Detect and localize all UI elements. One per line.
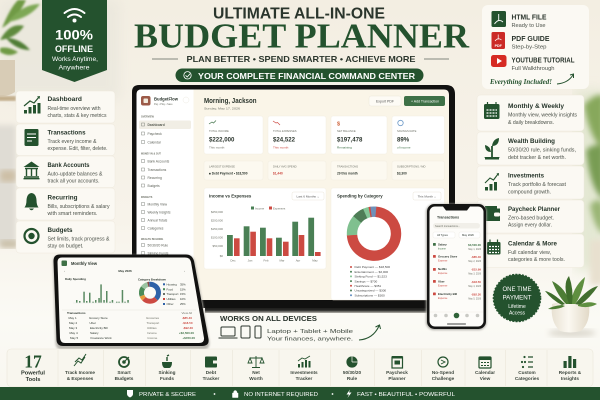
phone <box>426 204 486 330</box>
phone rows: May 4, 2026 <box>468 286 482 288</box>
phone rows: Expense <box>438 259 448 262</box>
tablet transactions table: Utilities <box>147 326 157 330</box>
buttons <box>369 96 445 106</box>
sidebar: Pay • Play • Save <box>154 103 173 106</box>
dashboard heading: Sunday, May 17, 2026 <box>204 106 240 110</box>
sidebar: Weekly Insights <box>148 210 171 214</box>
tablet transactions table: Transport <box>146 321 159 325</box>
tablet transactions table: May 3 <box>69 326 78 330</box>
feature: wealth building: 50/30/20 rule, sinking funds, <box>508 148 576 154</box>
feature: investments: Track portfolio & forecast <box>508 182 567 188</box>
stat card: total income: This month <box>209 146 225 150</box>
stat card: total income: $222,000 <box>209 136 235 144</box>
phone rows: May 1, 2026 <box>468 249 482 251</box>
tool: track income <box>65 354 95 381</box>
tool: custom categories: Custom <box>518 370 536 375</box>
tablet bar chart <box>65 277 130 303</box>
tablet transactions table: Income <box>147 331 157 335</box>
feature: dashboard: Real-time overview with <box>48 106 101 112</box>
stat card: savings rate: of income <box>397 146 411 150</box>
tool: debt tracker <box>203 356 220 381</box>
tool: net worth <box>248 356 264 381</box>
stat card: total expenses: This month <box>273 146 289 150</box>
phone rows: $3,500.00 <box>468 243 481 247</box>
tablet donut: 15% <box>180 292 186 296</box>
tablet donut: 15% <box>180 287 186 291</box>
tablet transactions table: View All <box>182 311 192 315</box>
donut chart: spending by category: Debt Payment — $18,500 <box>354 265 390 269</box>
stat card: net balance: NET BALANCE <box>337 129 356 133</box>
bar chart: income vs expenses: $50,000 <box>213 244 223 248</box>
phone rows: -$15.99 <box>471 268 481 272</box>
tablet transactions table: Salary <box>90 331 99 335</box>
phone rows: Netflix <box>438 267 447 271</box>
tool: calendar view: Calendar <box>475 370 495 375</box>
sidebar <box>136 90 194 300</box>
works on all devices: Laptop + Tablet + Mobile <box>267 329 353 335</box>
tool: investments tracker: Tracker <box>296 376 313 381</box>
stat card: net balance: Remaining <box>337 146 352 150</box>
tablet transactions table: Groceries <box>146 316 160 320</box>
feature: recurring: with smart reminders. <box>48 211 98 217</box>
bar chart: income vs expenses <box>204 188 326 269</box>
tablet transactions table: -$92.30 <box>183 326 193 330</box>
bar chart: income vs expenses: Dec <box>230 258 236 262</box>
tablet transactions table: May 2 <box>69 321 78 325</box>
stat card: total expenses: $24,522 <box>273 136 296 144</box>
sidebar: MONEY IN & OUT <box>141 152 161 156</box>
mini cards: SUBSCRIPTIONS / MO <box>397 164 426 168</box>
feature: recurring: Recurring <box>48 194 78 202</box>
tool: debt tracker: Tracker <box>203 376 220 381</box>
offline banner: 100% <box>55 26 94 42</box>
feature: monthly and weekly: Monthly & Weekly <box>508 103 564 110</box>
sidebar: Recurring <box>148 176 162 180</box>
feature: investments <box>477 166 584 199</box>
tablet screen: › <box>184 269 185 273</box>
phone rows <box>433 242 482 300</box>
stat card: net balance: $197,478 <box>337 136 363 144</box>
bar chart: income vs expenses: $200,000 <box>211 218 223 222</box>
offline banner: Works Anytime, <box>52 57 98 63</box>
phone rows: Salary <box>438 242 447 246</box>
title block: PLAN BETTER • SPEND SMARTER • ACHIEVE MORE <box>186 54 416 64</box>
feature: budgets: Budgets <box>48 227 73 234</box>
phone rows: Electricity Bill <box>438 292 457 296</box>
tablet donut: Utilities <box>166 297 176 301</box>
tablet donut: 25% <box>180 302 186 306</box>
stat card: savings rate <box>392 116 444 154</box>
dashboard heading: Morning, Jackson <box>204 98 256 105</box>
tablet screen: Monthly View <box>71 261 98 266</box>
title block: BUDGET PLANNER <box>134 16 470 56</box>
phone rows: May 2, 2026 <box>468 261 482 263</box>
phone rows: Expense <box>438 284 448 287</box>
tool: paycheck planner <box>386 356 408 381</box>
phone nav <box>430 312 483 324</box>
bar chart: income vs expenses: $0 <box>220 254 223 258</box>
stat card: total expenses: TOTAL EXPENSES <box>273 129 297 133</box>
mini cards: DAILY AVG SPEND <box>273 164 297 168</box>
feature: paycheck planner <box>477 200 584 233</box>
feature: budgets: stay on budget. <box>48 244 84 250</box>
icon: lock <box>232 390 238 398</box>
panel: included files: Full Walkthrough <box>512 66 554 72</box>
phone rows: Expense <box>438 272 448 275</box>
tool: calendar view: View <box>480 376 491 381</box>
one time payment badge <box>494 274 540 322</box>
works on all devices: Your finances, anywhere. <box>267 336 354 342</box>
tool: smart budgets: Smart <box>117 370 131 375</box>
tool: reports and insights: Insights <box>561 376 579 381</box>
feature: calendar and more: Calendar & More <box>508 240 557 248</box>
tablet transactions table <box>62 310 196 340</box>
panel: included files: HTML FILE <box>512 12 547 22</box>
tool: paycheck planner: Paycheck <box>386 370 408 375</box>
one time payment badge: PAYMENT <box>502 294 532 302</box>
tool: no-spend challenge: Challenge <box>432 376 455 381</box>
tool: 50/30/20 rule <box>343 356 362 381</box>
tool: sinking funds: Funds <box>160 376 174 381</box>
tablet donut: 10% <box>180 297 186 301</box>
phone rows: Uber <box>438 280 445 284</box>
donut chart: spending by category <box>331 188 444 300</box>
sidebar: Sinking Funds <box>148 252 169 256</box>
tablet screen: ‹ <box>64 269 65 273</box>
feature: recurring: Bills, subscriptions & salary <box>48 204 110 210</box>
decorative plant: top left <box>0 0 40 101</box>
tablet transactions table: Uber <box>90 321 96 325</box>
one time payment badge: Lifetime <box>508 304 526 310</box>
tablet screen <box>58 258 204 343</box>
tablet transactions table: -$18.50 <box>182 321 193 325</box>
bar chart: income vs expenses: $100,000 <box>211 236 223 240</box>
tablet transactions table: May 5 <box>70 336 79 340</box>
tool: net worth: Worth <box>249 376 263 381</box>
phone rows: -$18.50 <box>471 280 481 284</box>
feature: transactions: Transactions <box>48 130 86 136</box>
mini cards: 29 this month <box>337 172 358 176</box>
works on all devices <box>218 314 380 342</box>
title block: ULTIMATE ALL-IN-ONE <box>213 6 385 22</box>
mini cards <box>204 161 444 180</box>
offline banner: OFFLINE <box>55 44 93 54</box>
sidebar: Monthly View <box>148 202 168 206</box>
panel: right feature cards <box>477 95 584 268</box>
tool: 50/30/20 rule: 50/30/20 <box>343 370 362 375</box>
bar chart: income vs expenses: Expenses <box>273 206 286 210</box>
tool: reports and insights: Reports & <box>559 370 582 375</box>
phone rows: Grocery Store <box>438 254 458 258</box>
feature: bank accounts: Auto-update balances & <box>48 172 103 178</box>
feature: wealth building: debt tracker & net worth. <box>508 155 566 161</box>
sidebar: INSIGHTS <box>141 196 153 199</box>
feature: recurring <box>16 188 115 220</box>
donut chart: spending by category: Subscriptions — $300 <box>354 293 385 297</box>
tool: no-spend challenge <box>432 357 455 381</box>
mini cards: ■ Debt Payment • $18,500 <box>209 172 248 176</box>
footer bar: NO INTERNET REQUIRED <box>244 392 318 398</box>
plant: potted succulent <box>545 276 598 337</box>
tablet transactions table: May 4 <box>70 331 78 335</box>
tablet transactions table: Freelance Work <box>90 336 112 340</box>
feature: dashboard: charts, stats & key metrics <box>48 113 107 119</box>
feature: paycheck planner: Paycheck Planner <box>508 206 560 213</box>
bar chart: income vs expenses: Income <box>255 206 265 210</box>
feature: wealth building <box>477 132 584 165</box>
bar chart: income vs expenses: $250,000 <box>211 210 223 214</box>
tool: track income: Track Income <box>65 370 95 375</box>
feature: budgets: Set limits, track progress & <box>48 236 110 242</box>
one time payment badge: Access <box>509 310 526 316</box>
tablet screen: May 2026 <box>118 269 132 273</box>
donut chart: spending by category: Spending by Category <box>337 194 383 198</box>
feature: wealth building: Wealth Building <box>508 138 555 145</box>
tool count: 17 <box>24 352 42 372</box>
sidebar: Categories <box>148 226 164 230</box>
mini cards: TRANSACTIONS <box>337 164 358 168</box>
panel: included files: PDF GUIDE <box>512 34 550 43</box>
sidebar: Calendar <box>148 140 162 144</box>
bar chart: income vs expenses: Mar <box>280 258 285 262</box>
donut chart: spending by category: This Month ⌄ <box>418 194 436 198</box>
sidebar: Annual Totals <box>148 218 168 222</box>
title block <box>134 6 470 82</box>
stat card: savings rate: 89% <box>397 136 410 144</box>
tool: net worth: Net <box>252 370 260 375</box>
tablet donut: Category Breakdown <box>138 278 166 282</box>
panel: included files: Everything Included! <box>489 77 552 86</box>
bar chart: income vs expenses: Last 6 Months ⌄ <box>297 194 319 198</box>
bar chart: income vs expenses: Apr <box>296 258 300 262</box>
sidebar: 50/30/20 Rule <box>148 244 168 248</box>
phone screen <box>430 206 484 326</box>
tablet transactions table: Transactions <box>67 311 86 315</box>
donut chart: spending by category: Savings — $700 <box>354 279 377 283</box>
bar chart: income vs expenses: Income vs Expenses <box>209 194 252 198</box>
arrow <box>359 325 380 340</box>
tool: custom categories: Categories <box>515 376 540 381</box>
sidebar: Dashboard <box>148 123 165 127</box>
arrow <box>557 74 574 84</box>
tablet bar chart: Daily Spending <box>65 277 86 281</box>
phone screen: All Types <box>437 233 449 237</box>
stat card: net balance <box>331 116 387 154</box>
buttons: Export PDF <box>376 99 394 103</box>
laptop screen <box>136 90 449 300</box>
tool: investments tracker <box>290 356 318 381</box>
tool: 50/30/20 rule: Rule <box>347 376 357 381</box>
tagline pill: YOUR COMPLETE FINANCIAL COMMAND CENTER <box>198 71 416 81</box>
bar chart: income vs expenses: Jan <box>248 258 253 262</box>
feature: budgets <box>16 221 115 253</box>
phone rows: -$85.40 <box>471 255 481 259</box>
phone rows: Expense <box>438 297 448 300</box>
tool count: Tools <box>26 377 40 383</box>
dashboard heading <box>204 98 256 110</box>
stat card: net balance: $ <box>337 122 340 128</box>
feature: monthly and weekly: & daily breakdowns. <box>508 120 554 126</box>
tablet donut: Food <box>166 287 173 291</box>
feature: calendar and more: Full calendar view, <box>508 250 551 256</box>
feature: transactions: Track every income & <box>48 139 97 145</box>
sidebar: Bank Accounts <box>148 159 170 163</box>
tool: no-spend challenge: No-Spend <box>432 370 454 375</box>
sidebar: OVERVIEW <box>141 116 155 118</box>
feature: bank accounts: Bank Accounts <box>48 162 90 169</box>
stat card: total income <box>204 116 263 154</box>
feature: paycheck planner: Zero-based budget. <box>508 216 554 222</box>
laptop <box>132 85 455 313</box>
stat card: total income: TOTAL INCOME <box>209 129 229 133</box>
feature: dashboard <box>16 91 115 123</box>
phone screen: Transactions <box>437 216 459 220</box>
icon: shield <box>127 390 133 398</box>
donut chart: spending by category: Sinking Fund — $1,523 <box>354 275 387 279</box>
feature: investments: Investments <box>508 172 544 180</box>
tool: smart budgets: Budgets <box>115 376 134 381</box>
feature: paycheck planner: Assign every dollar. <box>508 222 552 228</box>
tablet donut: 35% <box>180 282 186 286</box>
offline banner: Anywhere <box>58 66 90 72</box>
tablet transactions table: -$85.40 <box>182 316 192 320</box>
feature: transactions: expense. Edit, filter, delete. <box>48 146 108 152</box>
one time payment badge: ONE TIME <box>502 286 532 293</box>
mini cards: $1,440 <box>273 172 283 176</box>
offline banner <box>42 0 107 82</box>
icon: devices <box>218 326 261 338</box>
buttons: + Add Transaction <box>411 99 439 103</box>
bar chart: income vs expenses: Feb <box>264 258 269 262</box>
tool count <box>21 352 45 383</box>
icon: youtube <box>491 55 506 67</box>
tool: sinking funds <box>159 355 176 381</box>
sidebar: WEALTH BUILDING <box>141 238 163 241</box>
icon: bolt <box>346 390 352 398</box>
tools bar <box>7 349 593 386</box>
feature: calendar and more <box>477 234 584 268</box>
tool: debt tracker: Debt <box>206 370 217 375</box>
tool: custom categories <box>515 356 540 381</box>
feature: calendar and more: categories & more tools. <box>508 257 565 263</box>
tablet donut: Housing <box>166 282 177 286</box>
tool: calendar view <box>475 357 495 381</box>
bar chart: income vs expenses: $150,000 <box>211 227 223 231</box>
mini cards: LARGEST EXPENSE <box>209 164 235 168</box>
feature: bank accounts <box>16 156 115 188</box>
tablet donut <box>138 278 186 306</box>
feature: transactions <box>16 124 115 156</box>
panel: left feature cards <box>16 91 115 253</box>
stat card: savings rate: SAVINGS RATE <box>397 129 417 133</box>
tool: paycheck planner: Planner <box>388 376 406 381</box>
tablet transactions table: +$450.00 <box>182 336 195 340</box>
phone rows: May 5, 2026 <box>468 298 482 300</box>
sidebar: BudgetFlow <box>154 96 179 102</box>
phone screen: May 2026 <box>462 233 474 237</box>
tool count: Powerful <box>21 370 45 376</box>
sidebar: Paycheck <box>148 132 162 136</box>
tool: sinking funds: Sinking <box>159 370 176 375</box>
tablet transactions table: May 1 <box>68 316 77 320</box>
tablet transactions table: +$3,500.00 <box>179 331 194 335</box>
panel: included files: Ready to Use <box>512 23 546 29</box>
icon: pdf guide: PDF <box>495 44 503 48</box>
footer bar <box>0 387 600 400</box>
decorative plant: right side <box>584 95 600 285</box>
sidebar: Transactions <box>148 168 167 172</box>
phone rows: May 3, 2026 <box>468 274 482 276</box>
feature: investments: compound growth. <box>508 190 551 196</box>
tool: investments tracker: Investments <box>290 370 318 375</box>
tablet donut: Transport <box>166 292 179 296</box>
bar chart: income vs expenses: May <box>312 258 318 262</box>
footer bar: FAST • BEAUTIFUL • POWERFUL <box>357 392 455 398</box>
icon: html file <box>492 11 506 27</box>
feature: bank accounts: track all your accounts. <box>48 178 100 184</box>
donut chart: spending by category: Healthcare — $351 <box>354 284 381 288</box>
works on all devices: WORKS ON ALL DEVICES <box>220 314 317 323</box>
phone rows: -$92.30 <box>471 292 481 296</box>
tablet transactions table: Income <box>148 336 158 340</box>
feature: monthly and weekly <box>477 95 584 131</box>
tool: smart budgets <box>115 357 134 381</box>
tagline pill <box>176 68 424 82</box>
footer bar: PRIVATE & SECURE <box>139 392 196 398</box>
tablet transactions table: Grocery Store <box>89 316 108 320</box>
panel: included files: Step-by-Step <box>512 44 546 50</box>
tablet <box>53 254 210 350</box>
icon: wifi <box>64 9 84 22</box>
mini cards: $3,300 <box>397 172 407 176</box>
stat card: total expenses <box>268 116 326 154</box>
sidebar: Budgets <box>148 184 160 188</box>
panel: included files: YOUTUBE TUTORIAL <box>512 58 575 64</box>
donut chart: spending by category: Entertainment — $3,000 <box>354 270 388 274</box>
panel: included files <box>482 5 589 89</box>
phone screen: Search transactions... <box>435 224 460 228</box>
feature: monthly and weekly: Monthly view, weekly insights <box>508 112 578 118</box>
tool: track income: & Expenses <box>67 376 94 381</box>
phone rows: Income <box>438 247 447 250</box>
feature: dashboard: Dashboard <box>48 96 82 103</box>
tool: reports and insights <box>559 356 582 381</box>
tablet transactions table: Electricity Bill <box>90 326 108 330</box>
tablet donut: Other <box>166 302 174 306</box>
donut chart: spending by category: Uncategorized — $300 <box>354 289 386 293</box>
